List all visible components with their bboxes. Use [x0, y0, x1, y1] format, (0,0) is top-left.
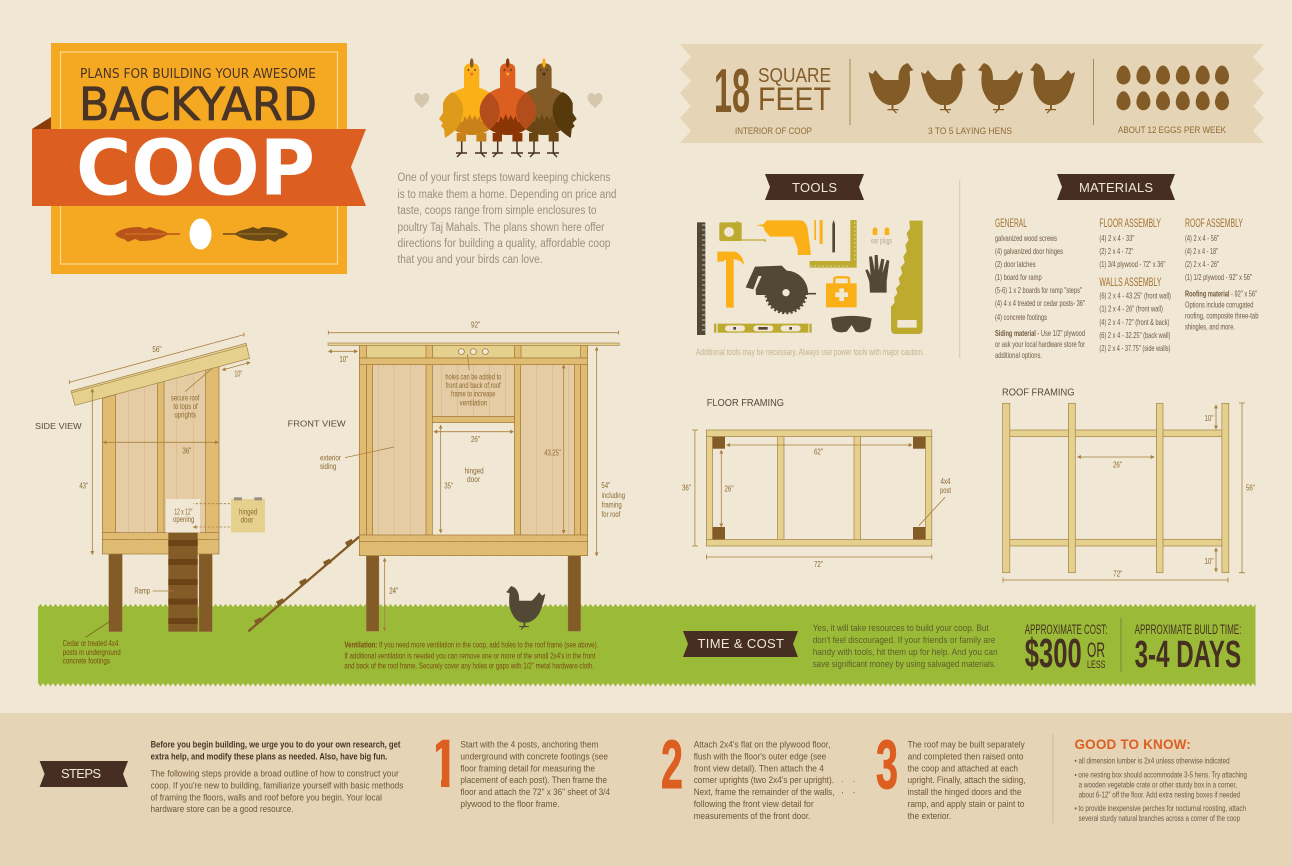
floor frame	[359, 535, 588, 556]
materials: general: (4) galvanized door hinges	[995, 246, 1063, 256]
materials: walls assembly: (2) 2 x 4 - 37.75" (side walls)	[1099, 343, 1171, 353]
steps heading: STEPS	[61, 766, 101, 781]
dimensions: 54"	[601, 481, 610, 490]
materials: roof assembly: Options include corrugated	[1185, 300, 1254, 310]
materials: roof assembly: ROOF ASSEMBLY	[1185, 218, 1243, 230]
dimensions	[1003, 403, 1255, 582]
dimensions: 92"	[471, 321, 480, 330]
post note: Cedar or treated 4x4	[63, 639, 119, 648]
label: roof framing: ROOF FRAMING	[1002, 388, 1075, 398]
materials: general: galvanized wood screws	[995, 233, 1057, 243]
step 1: Start with the 4 posts, anchoring them	[460, 740, 598, 750]
step 1: underground with concrete footings (see	[460, 752, 608, 762]
hinged door: door	[241, 516, 254, 525]
illustration: three hens and hearts	[414, 58, 602, 157]
dimensions: uprights	[174, 411, 196, 420]
approximate build time	[1135, 621, 1241, 676]
materials: roof assembly: (4) 2 x 4 - 56"	[1185, 233, 1219, 243]
walls	[102, 366, 219, 533]
dimensions: 43"	[79, 481, 88, 490]
tools heading	[765, 174, 864, 200]
dimensions: 36"	[682, 484, 691, 492]
ventilation note	[344, 641, 598, 671]
dimensions: post	[940, 486, 952, 495]
materials: general: (2) door latches	[995, 259, 1036, 269]
tools heading: TOOLS	[792, 180, 837, 195]
materials: walls assembly: (6) 2 x 4 - 32.25" (back wall)	[1099, 330, 1171, 340]
divider tools and materials	[959, 180, 961, 358]
dimensions: secure roof	[171, 393, 200, 402]
intro paragraph: One of your first steps toward keeping chickens	[398, 172, 611, 184]
steps introduction: coop. If you're new to building, familiarize yourself with basic methods	[151, 780, 404, 792]
dimensions: 26"	[1113, 460, 1122, 470]
front view diagram	[248, 321, 625, 671]
step 3	[876, 726, 1026, 822]
icon: glove	[865, 255, 889, 293]
icon: spirit level	[714, 324, 812, 333]
step 2: Attach 2x4's flat on the plywood floor,	[694, 740, 830, 750]
dimensions: 12 x 12"	[174, 507, 192, 516]
stat: square feet: 18	[714, 57, 750, 126]
subtitle: PLANS FOR BUILDING YOUR AWESOME	[80, 66, 316, 82]
steps introduction	[151, 740, 404, 815]
time and cost paragraph: Yes, it will take resources to build your coop. But	[813, 623, 989, 634]
step 2: front view detail). Then attach the 4	[694, 764, 824, 774]
materials: floor assembly: (4) 2 x 4 - 33"	[1099, 233, 1134, 243]
icon: ruler	[697, 222, 705, 335]
step 3: install the hinged doors and the	[908, 787, 1021, 798]
good to know: • all dimension lumber is 2x4 unless otherwise indicated	[1074, 755, 1230, 765]
dimensions: 10"	[1204, 414, 1214, 423]
dimensions: siding	[320, 462, 336, 471]
dimensions: Ramp	[134, 586, 150, 595]
materials: roof assembly: (2) 2 x 4 - 26"	[1185, 259, 1219, 269]
step 3: 3	[876, 726, 898, 803]
icon: ear plugs	[871, 227, 892, 245]
time and cost heading	[683, 631, 798, 657]
dimensions: framing	[602, 501, 622, 510]
approximate cost: LESS	[1087, 659, 1106, 671]
dimensions: 26"	[724, 484, 734, 494]
dimensions: 43.25"	[544, 448, 561, 457]
post note: concrete footings	[63, 657, 110, 666]
materials: floor assembly: (2) 2 x 4 - 72"	[1099, 246, 1133, 256]
materials heading	[1057, 174, 1175, 200]
label: side view: SIDE VIEW	[35, 421, 83, 431]
time and cost paragraph: don't feel discouraged. If your friends or family are	[813, 635, 995, 646]
materials: general: (5-6) 1 x 2 boards for ramp "steps"	[995, 285, 1082, 295]
step 1: floor framing detail for measuring the	[460, 764, 595, 774]
dimensions: exterior	[320, 453, 341, 462]
steps background band	[0, 713, 1292, 866]
tools caption: Additional tools may be necessary. Always use power tools with major caution.	[696, 347, 924, 357]
intro paragraph: directions for building a quality, affordable coop	[398, 238, 610, 250]
time and cost paragraph: save significant money by using salvaged materials.	[813, 659, 996, 670]
icon: hen silhouette on grass	[506, 586, 545, 630]
dimensions: 72"	[1113, 570, 1122, 578]
roof framing diagram	[1002, 388, 1255, 582]
ventilation note: If additional ventilation is needed you can remove one or more of the small 2x4's in the front	[344, 651, 596, 660]
materials: roof assembly: (4) 2 x 4 - 18"	[1185, 246, 1218, 256]
step 2	[661, 726, 854, 822]
dimensions: opening	[173, 515, 194, 524]
posts	[109, 554, 212, 632]
dimensions: to tops of	[173, 402, 198, 411]
icon: tape measure	[719, 221, 765, 242]
stat: hens	[868, 63, 1075, 137]
ventilation note: Ventilation: If you need more ventilation in the coop, add holes to the roof frame (see above).	[344, 641, 598, 650]
materials: walls assembly: WALLS ASSEMBLY	[1099, 277, 1162, 289]
label: floor framing: FLOOR FRAMING	[707, 398, 784, 409]
label: front view: FRONT VIEW	[288, 419, 347, 429]
icon: hand saw	[891, 221, 923, 334]
step 2: following the front view detail for	[694, 799, 814, 810]
intro paragraph: is to make them a home. Depending on price and	[398, 189, 616, 201]
dimensions: 35"	[444, 481, 453, 490]
stat: square feet: INTERIOR OF COOP	[735, 126, 812, 137]
dimensions: 10"	[234, 369, 242, 378]
materials: walls assembly: (6) 2 x 4 - 43.25" (front wall)	[1099, 290, 1171, 300]
dimensions: 24"	[389, 586, 398, 595]
materials heading: MATERIALS	[1079, 180, 1153, 195]
frame	[706, 430, 932, 546]
good to know: GOOD TO KNOW:	[1074, 737, 1191, 752]
dimensions: including	[602, 491, 625, 500]
dimensions: 10"	[339, 355, 348, 364]
steps introduction: hardware store can be a good resource.	[151, 804, 294, 815]
materials: walls assembly	[1099, 277, 1171, 353]
good to know: a wooden vegetable crate or other sturdy box in a corner,	[1079, 779, 1237, 789]
post note	[63, 639, 121, 666]
materials: general: additional options.	[995, 350, 1042, 360]
materials: general	[995, 218, 1085, 360]
dimensions: for roof	[602, 510, 621, 519]
ventilation note: and back of the roof frame. Securely cover any holes or gaps with 1/2" metal hardware cloth.	[344, 662, 594, 671]
materials: general: (1) board for ramp	[995, 272, 1042, 282]
step 3: upright. Finally, attach the siding,	[908, 775, 1026, 786]
steps introduction: The following steps provide a broad outline of how to construct your	[151, 768, 399, 780]
dimensions	[682, 430, 952, 569]
icon: egg	[190, 218, 212, 250]
hinged door: hinged	[239, 507, 257, 516]
step 3: The roof may be built separately	[908, 740, 1025, 750]
dimensions: 62"	[814, 448, 823, 456]
post note: posts in underground	[63, 648, 121, 657]
icon: first aid kit	[826, 277, 857, 307]
dimensions: 56"	[152, 345, 162, 354]
steps introduction: extra help, and modify these plans as needed. Also, have big fun.	[151, 752, 387, 762]
step 3: ramp, and apply stain or paint to	[908, 799, 1024, 810]
icon: left feather	[115, 227, 180, 242]
floor framing diagram	[682, 398, 952, 569]
materials: general: (4) concrete footings	[995, 312, 1047, 322]
materials: general: Siding material - Use 1/2" plywood	[995, 328, 1085, 338]
dimensions: frame to increase	[451, 390, 496, 399]
stat: eggs: ABOUT 12 EGGS PER WEEK	[1118, 125, 1227, 136]
posts	[712, 437, 925, 540]
roof frame	[328, 343, 619, 365]
steps heading	[40, 761, 128, 787]
stat: square feet: FEET	[758, 81, 831, 117]
step 3: the coop and attached at each	[908, 764, 1018, 774]
dimensions: hinged	[465, 466, 484, 475]
dimensions: door	[467, 475, 480, 484]
step 3: the exterior.	[908, 811, 951, 822]
steps introduction: Before you begin building, we urge you to do your own research, get	[151, 740, 401, 750]
dimensions	[320, 321, 625, 631]
step 1: floor and attach the 72" x 36" sheet of 3/4	[460, 787, 610, 798]
step 1: plywood to the floor frame.	[460, 799, 560, 810]
step 2: Next, frame the remainder of the walls,	[694, 787, 834, 798]
intro paragraph	[398, 172, 616, 266]
roof	[71, 343, 250, 405]
dimensions: 56"	[1246, 484, 1255, 492]
stat: square feet	[714, 57, 831, 137]
ramp	[248, 537, 359, 631]
hinged door	[231, 497, 265, 532]
icon: ear plugs: ear plugs	[871, 236, 892, 245]
approximate cost: $300	[1025, 630, 1082, 676]
icon: pencil	[832, 220, 835, 252]
intro paragraph: that you and your birds can love.	[398, 254, 542, 266]
time and cost heading: TIME & COST	[698, 636, 784, 651]
step 1: placement of each post). Then frame the	[460, 775, 607, 786]
ramp	[168, 533, 198, 632]
dimensions: 10"	[1204, 557, 1214, 566]
grass band	[38, 604, 1256, 687]
icon: right feather	[223, 227, 288, 242]
materials: roof assembly: Roofing material - 92" x 56"	[1185, 288, 1257, 298]
icon: carpenter square	[810, 220, 857, 268]
materials: roof assembly	[1185, 218, 1259, 332]
icon: drill	[756, 220, 811, 255]
good to know	[1074, 737, 1247, 823]
stats banner	[680, 44, 1264, 143]
materials: walls assembly: (1) 2 x 4 - 26" (front wall)	[1099, 304, 1163, 314]
materials: walls assembly: (4) 2 x 4 - 72" (front & back)	[1099, 317, 1170, 327]
materials: roof assembly: (1) 1/2 plywood - 92" x 56"	[1185, 272, 1252, 282]
dimensions: front and back of roof	[446, 381, 501, 390]
dimensions: 4x4	[940, 477, 951, 486]
icon: hammer	[717, 252, 744, 308]
approximate cost: APPROXIMATE COST:	[1025, 621, 1108, 637]
step 1	[436, 740, 610, 809]
step 2: 2	[661, 726, 683, 803]
icon: drill bits	[814, 220, 823, 244]
intro paragraph: poultry Taj Mahals. The plans shown here offer	[398, 222, 605, 234]
materials: floor assembly: (1) 3/4 plywood - 72" x 36"	[1099, 259, 1165, 269]
dashed guide lines	[193, 504, 230, 527]
dimensions: ventilation	[460, 398, 487, 407]
dimensions: 36"	[182, 446, 191, 455]
materials: roof assembly: shingles, and more.	[1185, 322, 1235, 332]
stat: square feet: SQUARE	[758, 65, 831, 87]
steps introduction: of framing the floors, walls and roof before you begin. Your local	[151, 792, 382, 804]
heading: backyard: BACKYARD	[79, 78, 317, 131]
stat: eggs	[1116, 66, 1229, 136]
intro paragraph: taste, coops range from simple enclosures to	[398, 205, 596, 217]
posts	[366, 556, 581, 631]
dimensions: 26"	[471, 435, 480, 444]
heading: coop: COOP	[76, 124, 315, 214]
frame	[1003, 403, 1229, 573]
icon: safety goggles	[831, 316, 872, 332]
materials: general: (4) 4 x 4 treated or cedar posts- 36"	[995, 298, 1085, 308]
ribbon	[32, 129, 366, 206]
time and cost paragraph	[813, 623, 998, 670]
icon: circular saw	[746, 266, 816, 313]
step 3: and completed then raised onto	[908, 752, 1024, 762]
walls	[359, 365, 588, 535]
stat: hens: 3 TO 5 LAYING HENS	[928, 126, 1012, 137]
title panel	[32, 43, 366, 274]
dimensions	[69, 333, 250, 637]
approximate cost: OR	[1087, 639, 1105, 662]
step 1: 1	[429, 725, 460, 802]
step 2: measurements of the front door.	[694, 811, 810, 822]
step 2: corner uprights (two 2x4's per upright).	[694, 775, 834, 786]
materials: general: GENERAL	[995, 218, 1027, 230]
time and cost paragraph: handy with tools, hit them up for help. And you can	[813, 647, 998, 658]
materials: floor assembly: FLOOR ASSEMBLY	[1099, 218, 1161, 230]
dimensions: holes can be added to	[445, 372, 502, 381]
tool illustrations	[697, 220, 923, 335]
materials: general: or ask your local hardware store for	[995, 339, 1085, 349]
side view diagram	[35, 333, 265, 666]
materials: roof assembly: roofing, composite three-tab	[1185, 310, 1259, 320]
opening	[166, 499, 200, 533]
floor frame	[102, 533, 219, 554]
dimensions: 72"	[814, 560, 823, 569]
materials: floor assembly	[1099, 218, 1165, 269]
step 2: flush with the floor's outer edge (see	[694, 752, 826, 762]
